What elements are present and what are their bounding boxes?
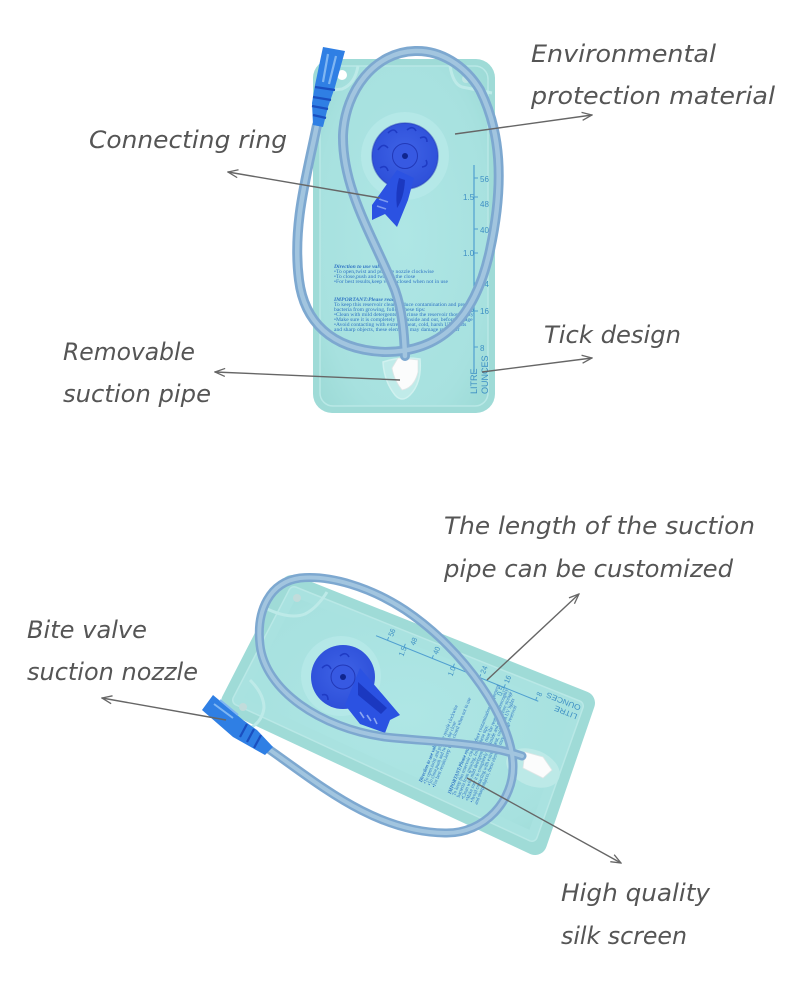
arrow: removable suction pipe (215, 372, 400, 380)
printed scale and directions: •To close,push and twist to the close (334, 274, 416, 280)
printed scale and directions: 56 (386, 627, 398, 638)
label: removable suction pipe (63, 338, 211, 408)
printed scale and directions: 48 (408, 636, 420, 647)
printed scale and directions: 1.0 (446, 665, 458, 677)
arrow: connecting ring (228, 172, 380, 198)
bite-valve seat pocket (500, 741, 566, 795)
icon: white elbow connector (392, 358, 418, 390)
printed scale and directions: IMPORTANT:Please read (333, 297, 395, 303)
label: customizable suction pipe length (443, 512, 755, 583)
printed scale and directions: To keep this reservoir clean, reduce contamination and prevent (452, 684, 502, 797)
suction tube (297, 51, 499, 356)
printed scale and directions: 8 (534, 691, 544, 698)
label: environmental protection material: Environmental (531, 40, 716, 68)
printed scale and directions: 40 (431, 645, 442, 656)
label: removable suction pipe: suction pipe (63, 380, 211, 408)
printed scale and directions: •Clean with mild detergents and rinse the reservoir thoroughly (334, 312, 474, 318)
icon: white elbow connector (523, 752, 552, 778)
printed scale and directions: bacteria from growing, follow these tips: (334, 306, 426, 313)
printed scale and directions: 24 (480, 280, 489, 289)
printed scale and directions: To keep this reservoir clean, reduce contamination and prevent (334, 302, 475, 308)
arrow: tick design (482, 358, 592, 372)
printed scale and directions: bacteria from growing, follow these tips: (457, 725, 490, 799)
printed scale and directions: •Avoid contacting with extreme heat, cold, harsh UV lights (470, 698, 517, 804)
printed scale and directions: 56 (480, 175, 489, 184)
label: high quality silk screen: High quality (561, 879, 711, 907)
printed scale and directions: •Make sure it is completely dry, inside and out, before storage (334, 316, 473, 323)
printed scale and directions: •Clean with mild detergents and rinse the reservoir thoroughly (461, 688, 510, 800)
label: bite valve suction nozzle (27, 616, 198, 686)
suction tube (259, 578, 522, 833)
label: environmental protection material (530, 40, 775, 110)
bladder body (233, 587, 583, 843)
label: tick design: Tick design (544, 321, 681, 349)
label: customizable suction pipe length: The length of the suction (444, 512, 755, 540)
printed scale and directions: 1.5 (396, 645, 409, 658)
icon: blue bite valve nozzle (202, 695, 273, 755)
printed scale and directions: •To open,twist and pull the nozzle clockwise (334, 269, 434, 275)
printed scale and directions: 16 (502, 674, 513, 685)
printed scale and directions: 0.5 (463, 305, 475, 314)
printed scale and directions: 40 (480, 226, 489, 235)
printed scale and directions: 1.0 (463, 249, 475, 258)
panel: upright hydration bladder (297, 47, 499, 413)
label: customizable suction pipe length: pipe can be customized (443, 555, 734, 583)
printed scale and directions: Direction to use valve (418, 741, 440, 784)
printed scale and directions: 0.5 (495, 685, 507, 697)
printed scale and directions: OUNCES (480, 355, 490, 394)
printed scale and directions: •For best results,keep valve closed when not in use (334, 279, 448, 285)
label: high quality silk screen: silk screen (561, 922, 687, 950)
label: high quality silk screen (561, 879, 711, 950)
printed scale and directions: OUNCES (545, 690, 582, 712)
printed scale and directions: •To close,push and twist to the close (428, 720, 459, 787)
icon: blue connecting ring cap with clip (301, 636, 400, 733)
printed scale and directions: •To open,twist and pull the nozzle clockwise (423, 704, 460, 785)
printed scale and directions: 16 (480, 307, 489, 316)
label: removable suction pipe: Removable (63, 338, 195, 366)
bladder body (313, 59, 495, 413)
printed scale and directions: IMPORTANT:Please read (447, 745, 472, 796)
printed scale and directions (331, 623, 582, 828)
printed scale and directions: 8 (480, 344, 485, 353)
label: environmental protection material: protection material (530, 82, 775, 110)
printed scale and directions: Direction to use valve (333, 264, 384, 270)
panel: rotated hydration bladder (202, 578, 583, 843)
printed scale and directions: LITRE (469, 368, 479, 394)
label: connecting ring: Connecting ring (89, 126, 287, 154)
arrow: customizable suction pipe length (487, 594, 579, 680)
printed scale and directions: •Avoid contacting with extreme heat, cold, harsh UV lights (334, 322, 466, 328)
printed scale and directions: and sharp objects, these elements may damage reservoir (474, 705, 519, 806)
printed scale and directions: and sharp objects, these elements may damage reservoir (334, 327, 460, 333)
label: bite valve suction nozzle: suction nozzle (27, 658, 198, 686)
arrow: silk screen (467, 778, 621, 863)
printed scale and directions: 24 (478, 664, 490, 675)
printed scale and directions (333, 165, 490, 394)
printed scale and directions: LITRE (552, 703, 579, 721)
icon: blue connecting ring cap with clip (361, 112, 449, 227)
arrow: environmental protection material (455, 115, 592, 134)
arrow: bite valve suction nozzle (102, 698, 226, 720)
bite-valve seat pocket (383, 358, 420, 399)
printed scale and directions: 48 (480, 200, 489, 209)
printed scale and directions: •Make sure it is completely dry, inside and out, before storage (465, 691, 514, 802)
label: bite valve suction nozzle: Bite valve (27, 616, 147, 644)
printed scale and directions: 1.5 (463, 193, 475, 202)
printed scale and directions: •For best results,keep valve closed when not in use (432, 696, 473, 789)
icon: blue bite valve nozzle (312, 47, 345, 127)
